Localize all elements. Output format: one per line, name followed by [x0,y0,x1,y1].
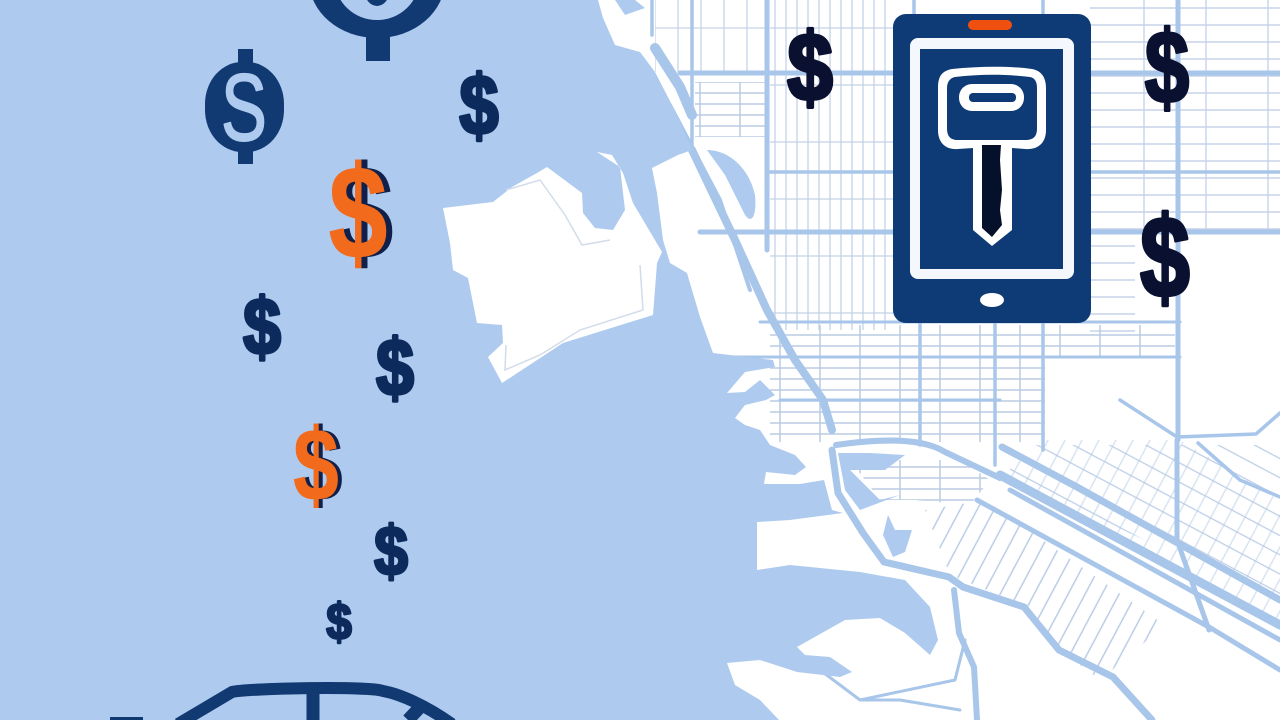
dollar sign: black: $ [787,13,833,120]
phone speaker [968,20,1012,30]
key icon [938,67,1046,246]
street grids [655,0,1280,680]
dollar sign: orange: $ [329,140,387,287]
phone home button [980,293,1004,307]
dollar sign: $ [243,282,281,371]
coin: top dollar [309,0,445,61]
dollar sign: $ [326,594,352,651]
main roads [652,0,1280,720]
dollar sign: orange: $ [335,140,393,287]
island: reclaimed land [443,152,662,383]
water: bay [0,0,938,720]
dollar sign: black: $ [1145,9,1189,125]
icon: car roof [110,688,452,720]
coin: dollar badge: S [221,54,267,161]
dollar sign: black: $ [1140,193,1190,322]
phone screen [910,38,1074,279]
dollar sign: $ [459,59,499,152]
icon: phone with key [893,14,1091,323]
dollar sign: orange: $ [293,407,339,522]
dollar sign: $ [376,323,414,412]
dollar sign: orange: $ [297,407,343,522]
dollar sign: $ [374,512,408,590]
coin: dollar badge [205,49,284,164]
water: inlets [615,0,912,557]
